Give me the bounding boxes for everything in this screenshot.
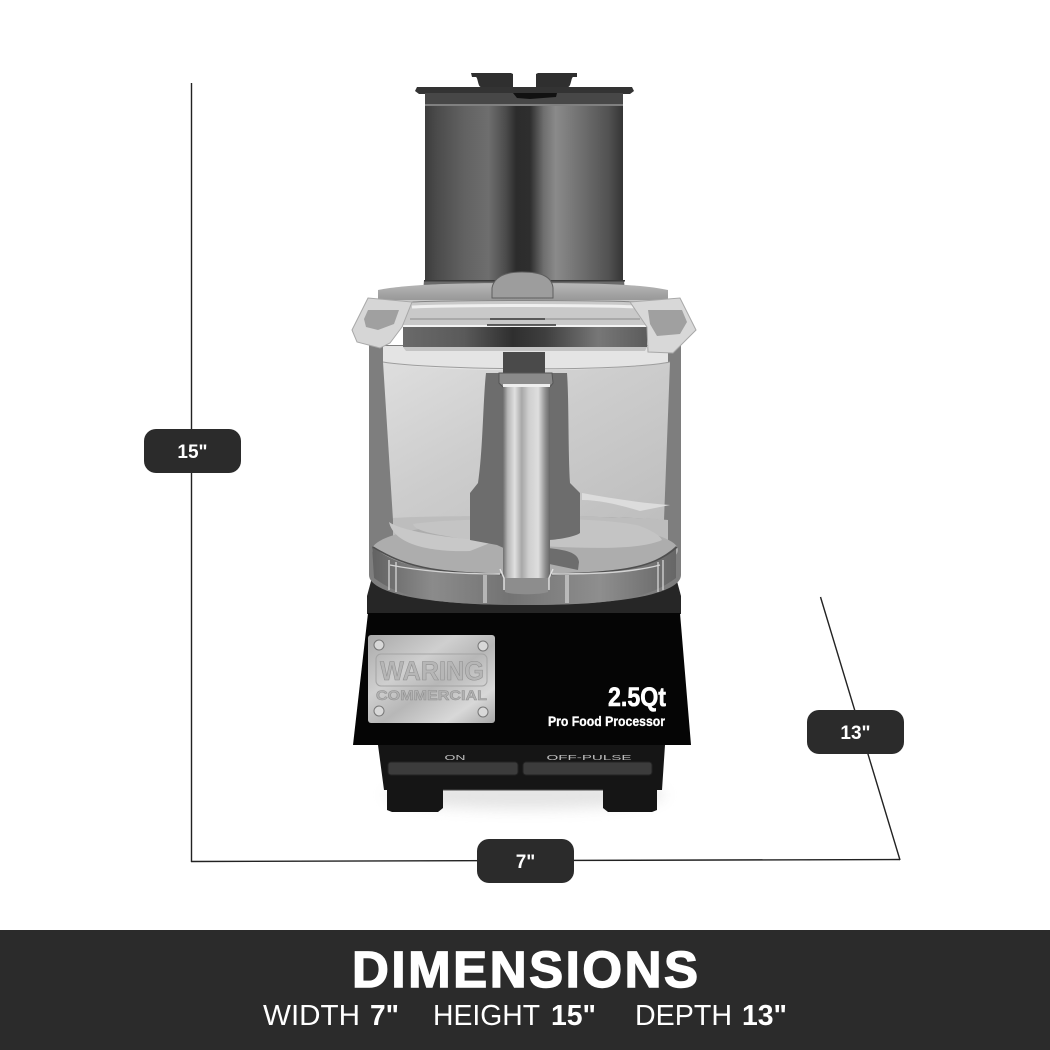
dimension summary: DEPTH <box>635 1000 732 1032</box>
waring commercial metal badge: COMMERCIAL <box>376 687 488 703</box>
on button <box>388 755 518 775</box>
lid top plate <box>378 283 668 300</box>
product name label: Pro Food Processor <box>548 714 666 729</box>
base shadow <box>385 781 665 809</box>
bowl <box>369 345 681 605</box>
height label pill <box>144 429 241 473</box>
waring commercial metal badge: WARING <box>380 656 484 686</box>
central neck <box>503 352 545 373</box>
dimension summary: 13" <box>742 1000 787 1032</box>
depth label pill <box>807 710 904 754</box>
base shoulders behind bowl <box>367 570 681 614</box>
footer band <box>0 930 1050 1050</box>
transparent work bowl lid <box>352 298 696 353</box>
dimension summary: WIDTH <box>263 1000 360 1032</box>
depth label pill: 13" <box>840 723 871 744</box>
dimension summary: HEIGHT <box>433 1000 540 1032</box>
width dimension line <box>191 860 900 862</box>
dimension summary: 7" <box>370 1000 399 1032</box>
dimension summary: 15" <box>551 1000 596 1032</box>
pusher bump <box>492 272 553 298</box>
off-pulse button <box>523 755 652 775</box>
footer title: DIMENSIONS <box>352 941 698 998</box>
height label pill: 15" <box>177 442 208 463</box>
blade hub <box>470 373 580 570</box>
product capacity label: 2.5Qt <box>608 682 666 712</box>
waring commercial metal badge <box>368 635 495 723</box>
width label pill <box>477 839 574 883</box>
feed chute cylinder <box>423 104 625 293</box>
width label pill: 7" <box>516 852 535 873</box>
depth dimension line <box>820 597 900 860</box>
feed chute lid <box>415 73 634 105</box>
motor base <box>353 613 691 812</box>
dimension summary <box>263 1000 787 1032</box>
food processor illustration <box>352 73 696 812</box>
central tube <box>499 373 553 594</box>
off-pulse button: OFF-PULSE <box>546 755 632 762</box>
height dimension line <box>190 83 192 862</box>
on button: ON <box>444 755 466 762</box>
